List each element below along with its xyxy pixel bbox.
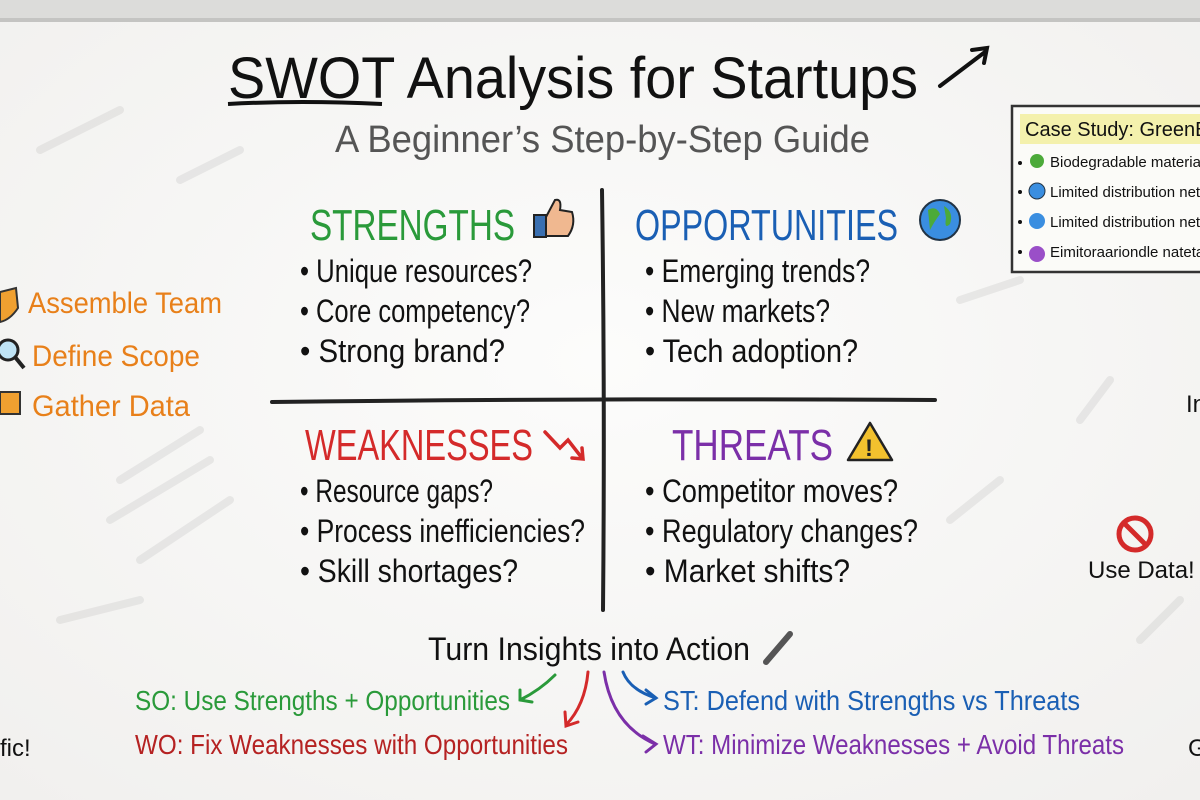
- callout: use data: [1088, 518, 1195, 584]
- panel: strengths: STRENGTHS: [310, 201, 515, 250]
- grid lines: [272, 190, 935, 610]
- panel: weaknesses: WEAKNESSES: [305, 421, 533, 470]
- panel: opportunities: • New markets?: [645, 293, 830, 329]
- icon: warning: !: [865, 435, 873, 462]
- side note: fic: fic!: [0, 735, 31, 762]
- icon: warning: [848, 423, 892, 462]
- strategies: [135, 685, 1124, 760]
- panel: weaknesses: • Resource gaps?: [300, 473, 493, 509]
- panel: strengths: • Strong brand?: [300, 333, 505, 369]
- strategies: ST: Defend with Strengths vs Threats: [663, 685, 1080, 716]
- panel: threats: • Regulatory changes?: [645, 513, 918, 549]
- panel: strengths: • Unique resources?: [300, 253, 532, 289]
- case study box: Limited distribution net: [1050, 184, 1200, 201]
- panel: weaknesses: • Skill shortages?: [300, 553, 518, 589]
- icon: thumbs up: [534, 200, 573, 237]
- subtitle: A Beginner’s Step-by-Step Guide: [335, 119, 870, 161]
- panel: opportunities: • Emerging trends?: [645, 253, 870, 289]
- icon: globe: [920, 200, 960, 240]
- panel: threats: • Competitor moves?: [645, 473, 898, 509]
- arrows: [520, 672, 656, 752]
- action heading: Turn Insights into Action: [428, 631, 750, 667]
- case study box: Limited distribution net: [1050, 214, 1200, 231]
- panel: strengths: • Core competency?: [300, 293, 530, 329]
- panel: opportunities: • Tech adoption?: [645, 333, 858, 369]
- title: SWOT Analysis for Startups: [228, 46, 918, 111]
- panel: threats: THREATS: [672, 421, 833, 470]
- steps list: Gather Data: [32, 390, 190, 423]
- steps list: [0, 287, 222, 423]
- case study box: [1012, 106, 1200, 272]
- strategies: SO: Use Strengths + Opportunities: [135, 685, 510, 716]
- panel: strengths: [300, 200, 573, 369]
- panel: opportunities: OPPORTUNITIES: [635, 201, 898, 250]
- strategies: WO: Fix Weaknesses with Opportunities: [135, 729, 568, 760]
- callout: use data: Use Data!: [1088, 557, 1195, 584]
- panel: opportunities: [635, 200, 960, 369]
- steps list: Assemble Team: [28, 287, 222, 320]
- strategies: WT: Minimize Weaknesses + Avoid Threats: [663, 729, 1124, 760]
- panel: threats: [645, 421, 918, 589]
- panel: weaknesses: • Process inefficiencies?: [300, 513, 585, 549]
- icon: down arrow: [545, 432, 583, 459]
- steps list: Define Scope: [32, 340, 200, 373]
- panel: weaknesses: [300, 421, 585, 589]
- panel: threats: • Market shifts?: [645, 553, 850, 589]
